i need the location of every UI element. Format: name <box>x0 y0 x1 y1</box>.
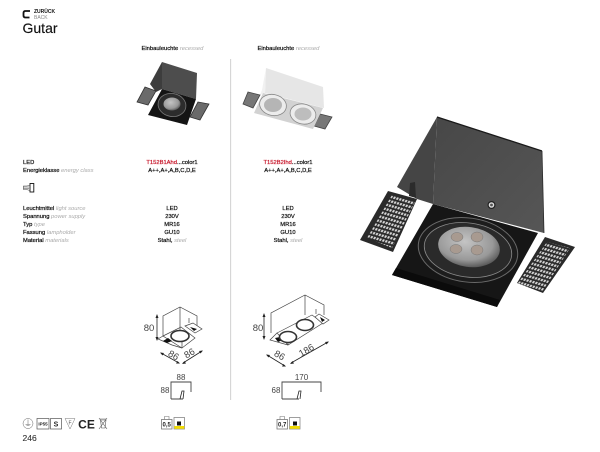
spec values column 2: Stahl, steel <box>274 238 303 244</box>
spec values column 2: A++,A+,A,B,C,D,E <box>264 168 312 174</box>
spec values column 1 <box>146 160 198 244</box>
weight and packaging icons 1 <box>162 416 184 429</box>
front frame <box>392 204 538 307</box>
back link: BACK <box>34 15 48 21</box>
dimension drawing 1 <box>144 307 203 364</box>
spec labels: technical: Typ type <box>23 222 45 228</box>
icon: energy label <box>24 184 34 192</box>
section drawing 2 <box>272 373 321 399</box>
section drawing 2: 68 <box>272 386 281 395</box>
dimension drawing 2 <box>253 295 329 366</box>
section drawing 1 <box>161 373 191 399</box>
column divider <box>230 59 232 400</box>
back link <box>24 8 55 21</box>
lamp <box>414 211 522 289</box>
spec labels: technical: Fassung lampholder <box>23 230 76 236</box>
column heading 1: Einbauleuchte recessed <box>142 46 204 52</box>
product photo: double white <box>243 68 332 129</box>
right perforated tab <box>517 237 575 293</box>
weight and packaging icons 2: 0,7 <box>278 422 287 428</box>
spec values column 1: 230V <box>165 214 179 220</box>
certification icons: S <box>54 422 59 428</box>
product photo: single black <box>137 62 209 125</box>
spec values column 2: GU10 <box>280 230 296 236</box>
dimension drawing 1: 86 <box>182 346 197 361</box>
large product photo <box>360 117 575 307</box>
spec labels: LED and energy class: Energieklasse energy class <box>23 168 94 174</box>
weight and packaging icons 2 <box>277 416 300 429</box>
spec values column 2: LED <box>282 206 294 212</box>
dimension drawing 2: 80 <box>253 323 263 334</box>
title: Gutar <box>22 20 58 36</box>
spec values column 2: T152B2Ihd...color1 <box>264 160 312 166</box>
spec values column 1: A++,A+,A,B,C,D,E <box>148 168 196 174</box>
spec values column 1: MR16 <box>164 222 180 228</box>
certification icons: CE <box>78 418 95 432</box>
spec values column 2: MR16 <box>280 222 296 228</box>
left perforated tab <box>360 182 417 252</box>
spec values column 2: 230V <box>281 214 295 220</box>
dimension drawing 2: 86 <box>272 348 287 363</box>
spec labels: technical: Leuchtmittel light source <box>23 206 86 212</box>
section drawing 1: 88 <box>177 373 186 382</box>
column heading 2: Einbauleuchte recessed <box>258 46 320 52</box>
dimension drawing 2: 186 <box>297 342 316 360</box>
certification icons: F <box>68 420 72 426</box>
spec labels: LED and energy class: LED <box>23 160 34 166</box>
housing <box>397 117 544 233</box>
spec labels: technical: Spannung power supply <box>23 214 85 220</box>
section drawing 2: 170 <box>295 373 309 382</box>
certification icons: IP55 <box>38 422 48 426</box>
spec values column 2 <box>264 160 312 244</box>
certification icons <box>23 418 107 432</box>
spec labels: technical: Material materials <box>23 238 69 244</box>
back link: ZURÜCK <box>34 8 55 15</box>
page number: 246 <box>22 433 37 443</box>
weight and packaging icons 1: 0,5 <box>163 422 172 428</box>
dimension drawing 1: 80 <box>144 323 154 334</box>
spec values column 1: Stahl, steel <box>158 238 187 244</box>
section drawing 1: 88 <box>161 386 170 395</box>
spec values column 1: GU10 <box>164 230 180 236</box>
spec values column 1: T152B1Ahd...color1 <box>146 160 198 166</box>
spec values column 1: LED <box>166 206 178 212</box>
dimension drawing 1: 86 <box>166 348 181 363</box>
